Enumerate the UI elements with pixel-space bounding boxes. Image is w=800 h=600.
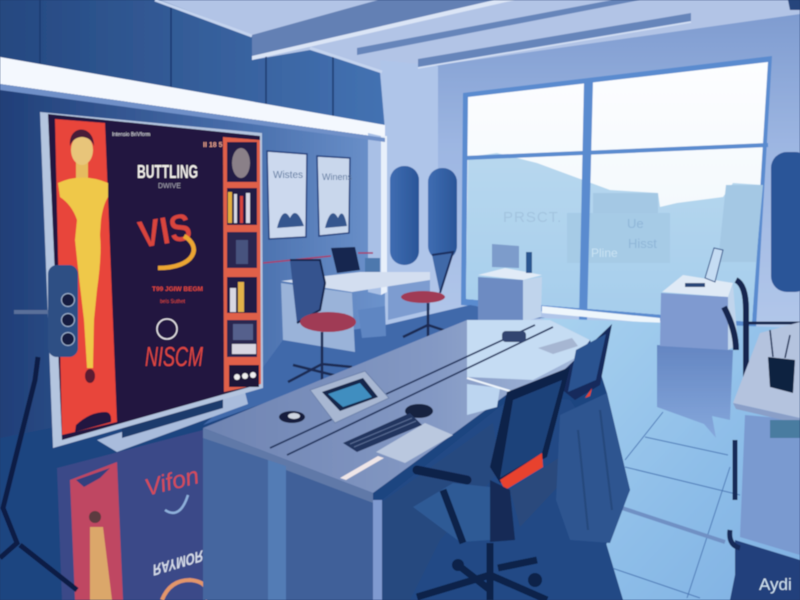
tablet on desk [310,371,389,423]
window-side desk left [478,244,542,322]
large display screen [40,112,263,452]
VIS logo: VIS [135,206,195,257]
window with skyline [461,56,772,328]
back desk with laptop [263,247,430,352]
main desk [203,320,590,600]
light bar and column [0,57,387,295]
NISCM logo [145,319,203,372]
front task chair [413,367,570,600]
wall poster two: Winens [322,172,353,182]
microphone stand and control panel [0,265,78,590]
large display screen: bels Suthet [160,299,186,305]
wall oval panels [390,152,800,292]
red office chairs [288,252,453,382]
ceiling beams [252,0,800,68]
window with skyline: Pline [591,246,618,260]
wall poster two [317,156,353,236]
yellow figure [58,130,108,383]
rear task chair [560,324,612,400]
keyboard and mat [343,413,453,463]
monitor reflection on floor [57,430,207,600]
panel footer [75,412,111,432]
wall poster one [267,151,307,239]
NISCM logo: NISCM [145,341,203,372]
watermark: Aydi [759,575,792,594]
monitor reflection on floor: Vifon [142,462,202,502]
window-side desk right [660,248,800,390]
window with skyline: Hisst [628,236,657,251]
monitor reflection on floor: RAYMOR [153,546,203,579]
large display screen: II 18 5 [203,142,223,149]
large display screen: DWIVE [158,183,181,190]
floor [203,305,800,600]
window with skyline: PRSCT. [503,209,562,226]
large display screen: Intensio BriVform [112,132,150,138]
red figure panel [55,119,117,435]
screen bookshelf [223,137,261,392]
under-desk floor shadow [382,395,630,600]
window with skyline: Ue [627,216,644,231]
right foreground desk [730,322,800,555]
jacket on chair [556,393,630,543]
mouse and phone items [279,331,578,423]
large display screen: T99 JGIW BEGM [152,286,203,293]
wall poster one: Wistes [273,170,303,181]
screen heading: BUTTLING [137,162,198,182]
